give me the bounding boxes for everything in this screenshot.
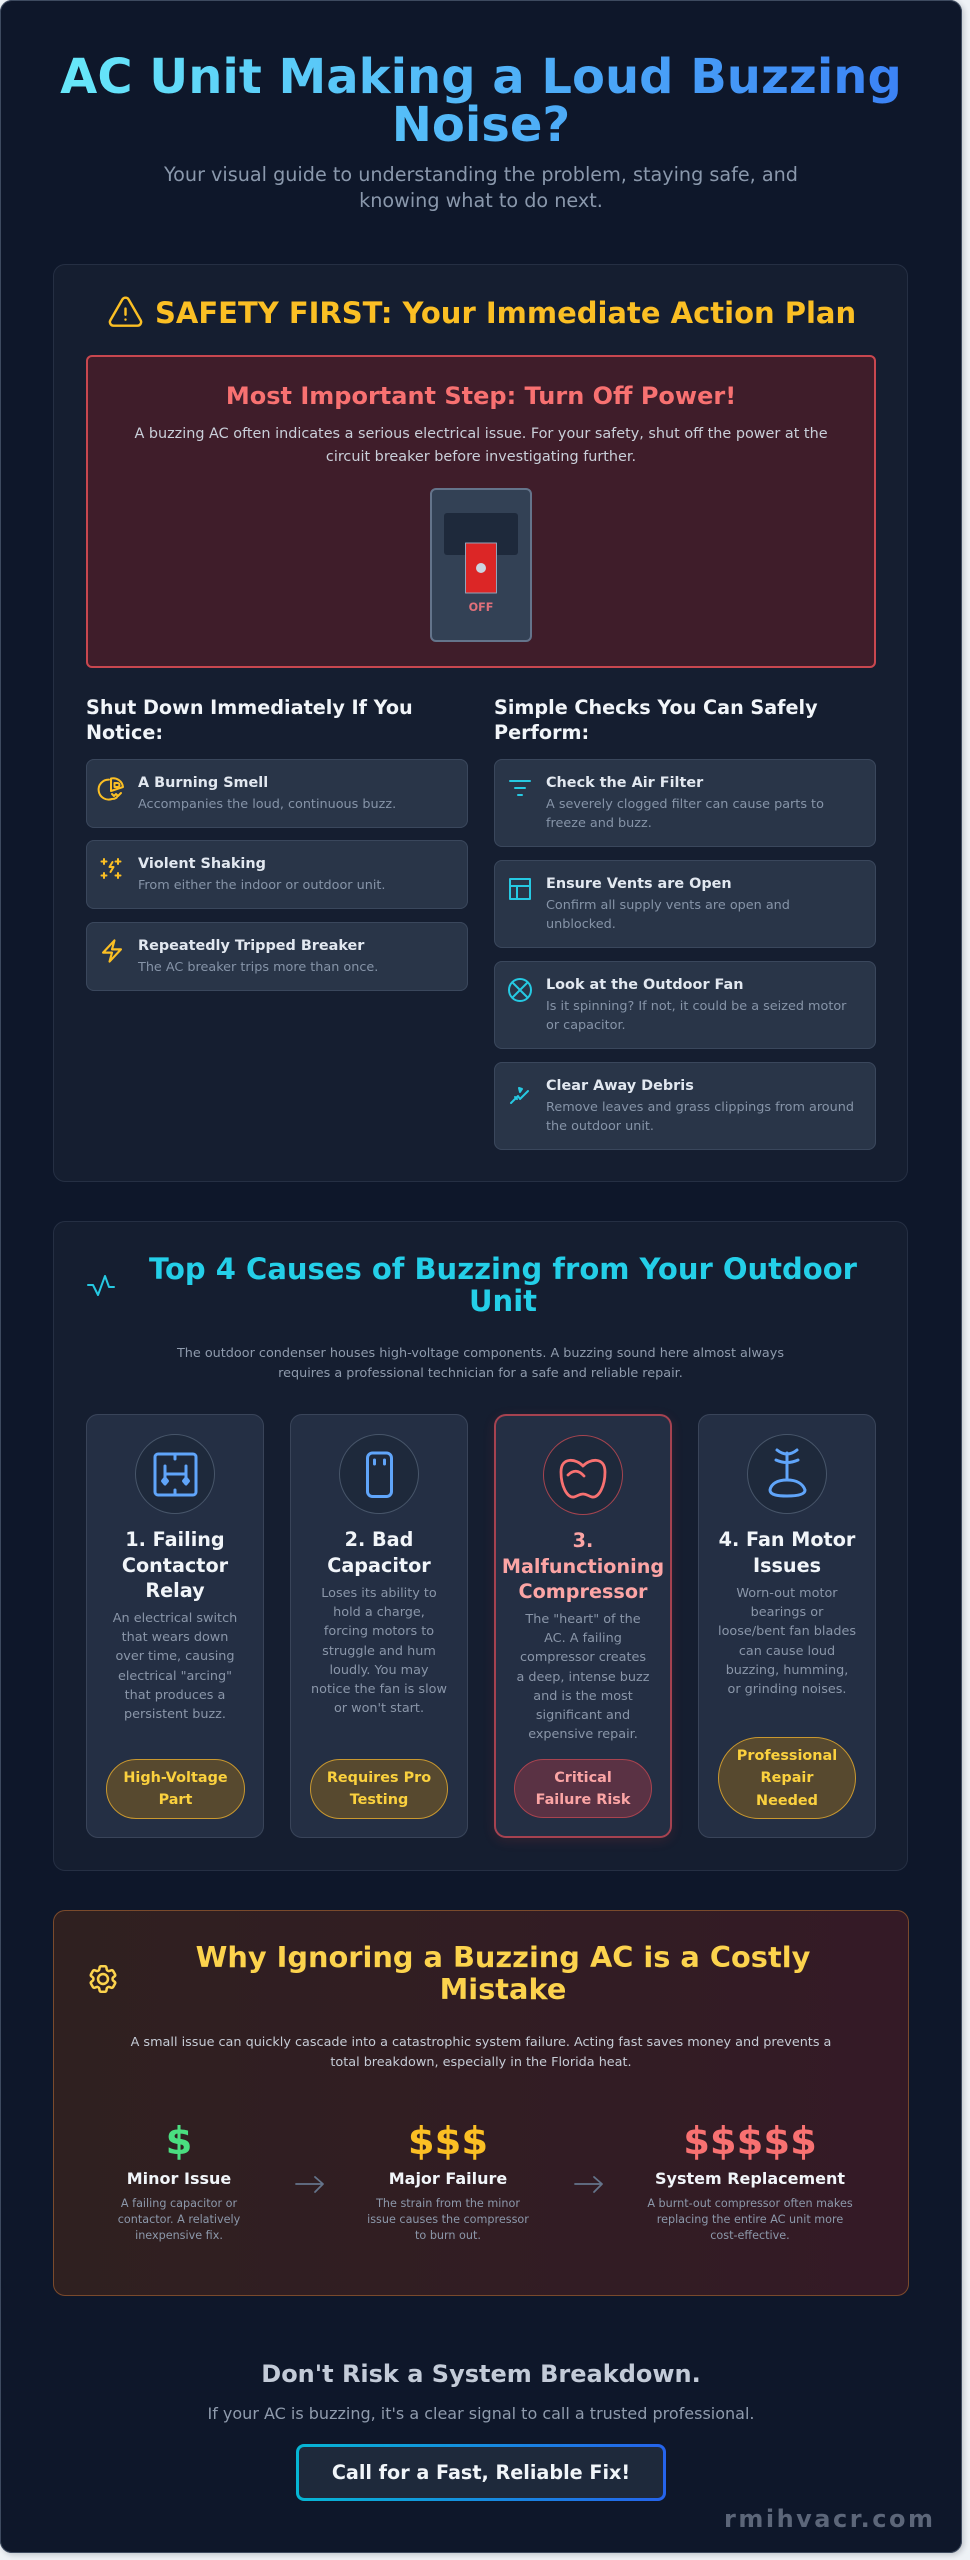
- heading text: Unit: [469, 1284, 537, 1318]
- text: cascade warning: [130, 2035, 831, 2070]
- text: cascade warning: A small issue can quickly cascade into a catastrophic system failure. Acting fast saves money and prevents a: [131, 2035, 831, 2050]
- heading: call to action: Don't Risk a System Breakdown.: [261, 2360, 701, 2388]
- description: forcing motors to: [324, 1624, 434, 1639]
- title: Relay: [145, 1579, 205, 1602]
- button: call for a fix: Call for a Fast, Reliable Fix!: [332, 2461, 630, 2484]
- description: inexpensive fix.: [135, 2229, 223, 2242]
- description: bearings or: [751, 1605, 823, 1620]
- watermark: rmihvacr.com: [724, 2505, 935, 2533]
- cost: five dollars: $$$$$: [683, 2119, 817, 2164]
- description: buzzing, humming,: [726, 1663, 848, 1678]
- description: that wears down: [122, 1630, 228, 1645]
- description: a deep, intense buzz: [516, 1670, 649, 1685]
- description: replacing the entire AC unit more: [657, 2213, 843, 2226]
- step: minor issue: [118, 2119, 240, 2242]
- label: System Replacement: [655, 2169, 845, 2188]
- text: causes intro: The outdoor condenser houses high-voltage components. A buzzing sound here almost always: [177, 1346, 784, 1361]
- description: Accompanies the loud, continuous buzz.: [138, 797, 396, 812]
- text: power warning: [134, 426, 828, 465]
- description: The "heart" of the: [525, 1612, 641, 1627]
- description: or grinding noises.: [728, 1682, 846, 1697]
- card: debris: [494, 1062, 876, 1150]
- description: to burn out.: [415, 2229, 481, 2242]
- heading: shut down column: Notice:: [86, 721, 163, 744]
- icon: debris broom: [510, 1087, 529, 1104]
- subtitle: [164, 163, 798, 212]
- title: Issues: [753, 1554, 821, 1577]
- title: 3.: [573, 1529, 593, 1552]
- title: [719, 1528, 856, 1577]
- card: violent shaking: [86, 840, 468, 909]
- icon: filter: [509, 780, 531, 796]
- description: [546, 898, 790, 932]
- step: major failure: [338, 2118, 558, 2252]
- description: cost-effective.: [710, 2229, 790, 2242]
- icon: pulse: [87, 1275, 115, 1296]
- description: the outdoor unit.: [546, 1119, 654, 1134]
- description: persistent buzz.: [124, 1707, 226, 1722]
- description: loose/bent fan blades: [718, 1624, 856, 1639]
- title: Ensure Vents are Open: [546, 876, 732, 892]
- text: power warning: circuit breaker before investigating further.: [326, 449, 636, 465]
- description: contactor. A relatively: [118, 2213, 240, 2226]
- title: 1. Failing: [125, 1528, 225, 1551]
- badge: [106, 1759, 245, 1819]
- description: compressor creates: [520, 1650, 646, 1665]
- card: air filter: [494, 759, 876, 847]
- description: issue causes the compressor: [367, 2213, 529, 2226]
- description: [546, 797, 824, 831]
- description: [311, 1586, 447, 1716]
- description: Remove leaves and grass clippings from around: [546, 1100, 854, 1115]
- description: or capacitor.: [546, 1018, 626, 1033]
- description: unblocked.: [546, 917, 616, 932]
- description: Worn-out motor: [736, 1586, 838, 1601]
- description: AC. A failing: [544, 1631, 622, 1646]
- title: Repeatedly Tripped Breaker: [138, 938, 364, 954]
- heading: simple checks column: Perform:: [494, 721, 589, 744]
- description: can cause loud: [739, 1644, 835, 1659]
- description: electrical "arcing": [118, 1669, 232, 1684]
- badge: Testing: [350, 1792, 408, 1808]
- description: hold a charge,: [333, 1605, 425, 1620]
- title: Contactor: [122, 1554, 228, 1577]
- icon: fan motor: [747, 1434, 827, 1514]
- subtitle: Your visual guide to understanding the problem, staying safe, and: [164, 163, 798, 186]
- description: A burnt-out compressor often makes: [647, 2197, 853, 2210]
- description: The strain from the minor: [376, 2197, 520, 2210]
- description: loudly. You may: [329, 1663, 429, 1678]
- icon: vent grid: [509, 878, 531, 900]
- card: vents: [494, 860, 876, 948]
- heading text: Mistake: [440, 1972, 566, 2006]
- text: causes intro: [176, 1346, 784, 1381]
- description: [118, 2197, 240, 2242]
- heading: safety first: [108, 296, 856, 330]
- card: tripped breaker: [86, 922, 468, 991]
- description: An electrical switch: [113, 1611, 237, 1626]
- heading: costly mistake: [90, 1940, 810, 2006]
- icon: relay: [135, 1434, 215, 1514]
- title: Noise?: [392, 97, 570, 153]
- title: Look at the Outdoor Fan: [546, 977, 744, 993]
- heading: simple checks column: [494, 696, 818, 744]
- label: Minor Issue: [127, 2169, 231, 2188]
- panel: safety first: [53, 264, 908, 1182]
- label: Major Failure: [389, 2169, 507, 2188]
- description: [546, 1100, 854, 1134]
- icon: compressor heart: [543, 1435, 623, 1515]
- text: power warning: A buzzing AC often indicates a serious electrical issue. For your safety, shut off the power at the: [134, 426, 828, 442]
- card: malfunctioning compressor: [494, 1414, 672, 1838]
- description: or won't start.: [334, 1701, 424, 1716]
- description: that produces a: [125, 1688, 225, 1703]
- heading: shut down column: Shut Down Immediately If You: [86, 696, 413, 719]
- card: bad capacitor: [290, 1414, 468, 1838]
- badge: Critical: [554, 1770, 612, 1786]
- panel: costly mistake: [53, 1910, 909, 2296]
- description: notice the fan is slow: [311, 1682, 447, 1697]
- card: outdoor fan: [494, 961, 876, 1049]
- title: Clear Away Debris: [546, 1078, 694, 1094]
- description: A failing capacitor or: [121, 2197, 237, 2210]
- icon: capacitor: [339, 1434, 419, 1514]
- icon: gear: [90, 1965, 116, 1993]
- icon: breaker switch off: [430, 488, 532, 642]
- cost: three dollars: $$$: [408, 2119, 488, 2164]
- badge: High-Voltage: [123, 1770, 228, 1786]
- heading: shut down column: [86, 696, 413, 744]
- badge: Requires Pro: [327, 1770, 431, 1786]
- title: Malfunctioning: [502, 1555, 664, 1578]
- badge: [310, 1759, 448, 1819]
- card: contactor relay: [86, 1414, 264, 1838]
- icon: warning triangle: [108, 296, 142, 327]
- title: [327, 1528, 431, 1577]
- heading text: SAFETY FIRST: Your Immediate Action Plan: [155, 296, 856, 330]
- description: significant and: [536, 1708, 630, 1723]
- badge: [514, 1759, 652, 1818]
- title: [57, 53, 905, 149]
- title: [502, 1529, 664, 1603]
- cost: one dollar: $: [166, 2119, 192, 2164]
- description: [546, 999, 846, 1033]
- title: A Burning Smell: [138, 775, 268, 791]
- text: causes intro: requires a professional technician for a safe and reliable repair.: [278, 1366, 683, 1381]
- description: The AC breaker trips more than once.: [138, 960, 378, 975]
- heading text: Why Ignoring a Buzzing AC is a Costly: [196, 1940, 810, 1974]
- title: Compressor: [519, 1580, 647, 1603]
- step: system replacement: [640, 2118, 860, 2252]
- badge: Professional: [737, 1748, 837, 1764]
- text: call to action: If your AC is buzzing, it's a clear signal to call a trusted professional.: [207, 2404, 755, 2423]
- title: Violent Shaking: [138, 856, 266, 872]
- title: [122, 1528, 228, 1602]
- heading text: [196, 1940, 810, 2006]
- heading: simple checks column: Simple Checks You Can Safely: [494, 696, 818, 719]
- description: [718, 1586, 856, 1697]
- description: [338, 2196, 558, 2244]
- title: AC Unit Making a Loud Buzzing: [60, 49, 902, 105]
- card: fan motor: [698, 1414, 876, 1838]
- panel: turn off power: [86, 355, 876, 668]
- heading text: Top 4 Causes of Buzzing from Your Outdoor: [149, 1252, 857, 1286]
- title: Check the Air Filter: [546, 775, 703, 791]
- subtitle: knowing what to do next.: [359, 189, 603, 212]
- icon: burning smell: [98, 777, 124, 801]
- description: over time, causing: [115, 1649, 235, 1664]
- description: [640, 2196, 860, 2244]
- icon: sparks: [100, 858, 122, 879]
- text: cascade warning: total breakdown, especially in the Florida heat.: [330, 2055, 632, 2070]
- badge: Part: [159, 1792, 192, 1808]
- heading text: [149, 1252, 857, 1318]
- title: 4. Fan Motor: [719, 1528, 855, 1551]
- description: freeze and buzz.: [546, 816, 652, 831]
- arrow: minor to major: [295, 2172, 325, 2196]
- description: Confirm all supply vents are open and: [546, 898, 790, 913]
- description: From either the indoor or outdoor unit.: [138, 878, 385, 893]
- badge: Repair: [761, 1770, 813, 1786]
- description: Is it spinning? If not, it could be a seized motor: [546, 999, 846, 1014]
- description: [112, 1611, 237, 1722]
- description: Loses its ability to: [321, 1586, 437, 1601]
- title: 2. Bad: [345, 1528, 413, 1551]
- heading: top 4 causes: [87, 1252, 857, 1318]
- description: A severely clogged filter can cause parts to: [546, 797, 824, 812]
- icon: lightning bolt: [102, 939, 122, 963]
- button: call for a fix: [296, 2444, 666, 2501]
- description: and is the most: [533, 1689, 633, 1704]
- icon: breaker switch off: OFF: [469, 601, 493, 614]
- icon: fan circle: [508, 978, 532, 1002]
- description: struggle and hum: [322, 1644, 436, 1659]
- heading: most important step: Most Important Step: Turn Off Power!: [226, 382, 736, 410]
- arrow: major to replacement: [574, 2172, 604, 2196]
- panel: top 4 causes: [53, 1221, 908, 1871]
- title: Capacitor: [327, 1554, 431, 1577]
- badge: Failure Risk: [536, 1792, 630, 1808]
- badge: [718, 1737, 856, 1819]
- card: burning smell: [86, 759, 468, 828]
- badge: Needed: [756, 1793, 818, 1809]
- description: [516, 1612, 649, 1742]
- description: expensive repair.: [528, 1727, 638, 1742]
